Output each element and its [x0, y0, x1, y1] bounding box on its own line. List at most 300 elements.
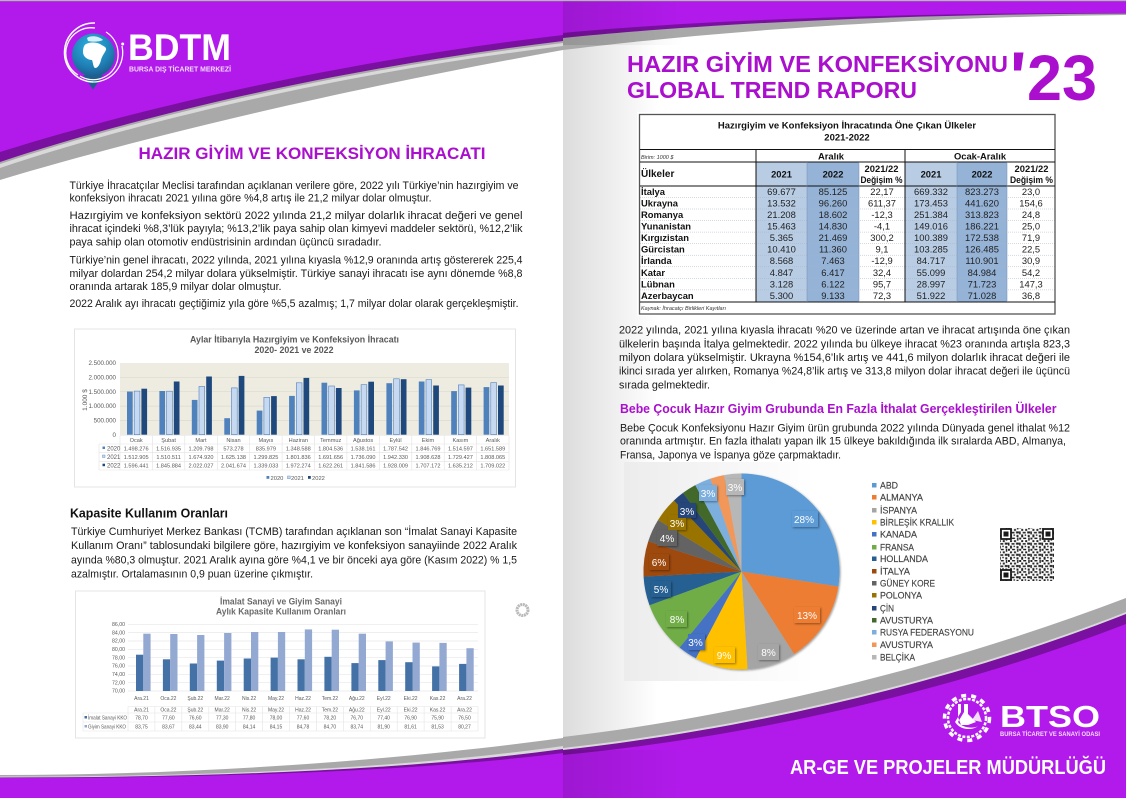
table rows: Azerbaycan [641, 290, 694, 301]
data table: 1.348.588 [286, 446, 311, 452]
table rows: 21.208 [767, 209, 796, 220]
table rows: 7.463 [821, 255, 845, 266]
data table: 1.808.065 [480, 455, 505, 461]
text block: leading countries: ülkelerin başında İtalya gelmektedir. 2022 yılında bu ülkeye ihracat %23 oranında artışla 823,3 [619, 337, 1070, 350]
pie labels: 5% [654, 585, 668, 596]
bar chart: monthly apparel exports: 0 [113, 432, 117, 439]
text block: baby apparel imports: Fransa, Japonya ve İspanya göze çarpmaktadır. [620, 449, 841, 462]
pie legend: FRANSA [880, 542, 915, 552]
pie labels: 6% [652, 558, 666, 569]
table rows: 126.485 [965, 244, 999, 255]
top edge strip [0, 0, 1126, 1]
data table: 77,60 [297, 716, 309, 722]
bar chart: monthly apparel exports: 500.000 [94, 418, 117, 425]
table headers: 2022 [823, 168, 843, 180]
table rows: 3.128 [770, 278, 793, 289]
table rows: 8.568 [770, 255, 793, 266]
data table: Tem.22 [322, 708, 338, 714]
pie labels: 3% [670, 519, 684, 530]
table rows: 69.677 [767, 186, 796, 197]
data table: 835.979 [256, 446, 276, 452]
data table: 1.908.628 [416, 455, 440, 461]
data table: 1.674.920 [189, 455, 213, 461]
plot background [120, 363, 509, 435]
y axis labels: 84,00 [112, 630, 125, 636]
table rows: 5.300 [770, 290, 793, 301]
table rows: Gürcistan [641, 244, 685, 255]
table rows: 71.028 [968, 290, 996, 301]
table rows: 85.125 [819, 186, 847, 197]
data table: Mart [195, 438, 207, 444]
pie labels: 13% [797, 611, 817, 622]
data table: 1.339.033 [253, 464, 278, 470]
data table: Ağu.22 [349, 708, 365, 714]
table headers: Aralık [818, 150, 845, 162]
table rows: 172.538 [965, 232, 999, 243]
text block: capacity usage: ayında %80,3 olmuştur. 2021 Aralık ayına göre %4,1 ve bir önceki aya göre (Kasım 2022) % 1,5 [71, 554, 517, 566]
table rows: 71,9 [1022, 232, 1040, 243]
category labels: Ağu.22 [349, 696, 365, 702]
data table: 83,67 [162, 724, 175, 730]
table headers: Ülkeler [641, 167, 674, 180]
table rows: 5.365 [770, 232, 793, 243]
table rows: 186.221 [965, 221, 999, 232]
data table: 1.804.536 [318, 446, 343, 452]
data table: 1.622.261 [318, 464, 343, 470]
pie labels: 8% [761, 648, 776, 659]
text block: export intro: paya sahip olan otomotiv endüstrisinin ardından üçüncü sıradadır. [70, 237, 382, 249]
data table: Ocak [130, 438, 143, 444]
text block: export intro [70, 179, 523, 310]
bottom banner: right page [563, 598, 1126, 798]
icon: QR code [1000, 528, 1054, 581]
table rows: 11.360 [819, 244, 847, 255]
data table: Ağustos [353, 438, 373, 444]
pie legend: ALMANYA [880, 492, 924, 502]
data table: Nisan [226, 438, 241, 444]
data table: 77,80 [243, 716, 256, 722]
data table: 1.299.825 [253, 455, 278, 461]
table rows: 84.717 [917, 255, 945, 266]
bar chart: monthly apparel exports [74, 329, 516, 487]
table rows: 28.997 [917, 278, 945, 289]
pie chart: import countries [624, 462, 839, 681]
y axis labels: 70,00 [112, 689, 125, 695]
category labels: Oca.22 [160, 696, 177, 702]
pie labels: 28% [794, 515, 814, 526]
text block: baby apparel imports [620, 422, 1070, 462]
text block: export intro: konfeksiyon ihracatı 2021 yılına göre %4,8 artış ile 21,2 milyar dolar olmuştur. [70, 193, 432, 205]
table rows: 6.417 [821, 267, 845, 278]
top banner: right page [563, 0, 1126, 50]
data table: Eyl.22 [377, 708, 391, 714]
pie labels: 8% [670, 615, 684, 626]
pie labels: 4% [660, 534, 674, 545]
pie labels: 3% [688, 638, 703, 649]
table rows: 18.602 [819, 209, 847, 220]
data table: Temmuz [320, 438, 341, 444]
data table: 2022 [107, 464, 121, 470]
table source: Kaynak: İhracatçı Birlikleri Kayıtları [641, 305, 726, 312]
data table: 1.841.586 [351, 464, 376, 470]
data table: 1.787.542 [383, 446, 408, 452]
data table: 2020 [107, 446, 121, 452]
pie labels: 9% [717, 651, 731, 662]
table rows: 823.273 [965, 186, 999, 197]
icon: small grey gear [517, 604, 528, 616]
table rows: İrlanda [641, 255, 673, 266]
table shaded columns [756, 162, 1007, 302]
table rows: -12,9 [871, 255, 893, 266]
data table: 1.510.511 [156, 455, 181, 461]
data table: 1.209.798 [189, 446, 213, 452]
table rows: 9,1 [875, 244, 889, 255]
category labels [134, 696, 472, 702]
text block: export intro: Türkiye’nin genel ihracatı, 2022 yılında, 2021 yılına kıyasla %12,9 oranında artış göstererek 225,4 [70, 255, 522, 267]
table headers: 2021 [921, 168, 941, 180]
category labels: Haz.22 [295, 696, 311, 702]
data table: 1.538.161 [351, 446, 376, 452]
y axis labels: 74,00 [112, 672, 125, 678]
data table: 75,90 [431, 716, 444, 722]
table rows: 23,0 [1022, 186, 1040, 197]
table rows: 32,4 [873, 267, 891, 278]
logo subtitle: BURSA TİCARET VE SANAYİ ODASI [1000, 730, 1100, 738]
category labels: Ara.22 [457, 696, 472, 702]
data table: 76,70 [351, 716, 363, 722]
pie legend: HOLLANDA [880, 553, 929, 564]
data table: 76,50 [458, 716, 471, 722]
logo subtitle: BURSA DIŞ TİCARET MERKEZİ [129, 66, 231, 74]
title: report name [627, 51, 1008, 103]
heading: baby apparel imports: Bebe Çocuk Hazır Giyim Grubunda En Fazla İthalat Gerçekleştirilen Ülkeler [620, 401, 1056, 416]
data table: Aralık [486, 438, 500, 444]
pie legend: RUSYA FEDERASYONU [880, 626, 974, 638]
table rows: 9.133 [821, 290, 845, 301]
table rows: 611,37 [868, 198, 896, 208]
bar chart: monthly apparel exports: 1.000.000 [88, 403, 117, 410]
table headers: 2021/22 [865, 163, 898, 174]
category labels: Nis.22 [242, 696, 256, 702]
data table: 1.709.022 [480, 464, 505, 470]
category labels: Kas.22 [430, 696, 446, 702]
table headers [641, 150, 1054, 185]
data table: 78,20 [324, 716, 336, 722]
y axis labels [112, 622, 125, 695]
table rows: 55.099 [917, 267, 945, 278]
data table: İmalat Sanayi KKO [88, 714, 127, 722]
data table: Ekim [422, 438, 435, 444]
pie legend: BİRLEŞİK KRALLIK [880, 516, 955, 528]
y axis labels: 80,00 [112, 647, 125, 653]
chart title [216, 596, 346, 616]
table rows: 4.847 [770, 267, 793, 278]
table rows: 13.532 [767, 198, 796, 208]
category labels: Mar.22 [215, 696, 230, 702]
data table: 80,27 [458, 724, 471, 730]
data table: 78,00 [270, 716, 282, 722]
data table: 1.498.276 [124, 446, 149, 452]
table rows: 100.389 [914, 232, 948, 243]
table rows: 147,3 [1019, 278, 1043, 289]
data table: 1.635.212 [448, 464, 473, 470]
data table: 1.846.769 [416, 446, 440, 452]
data table: Haziran [289, 438, 308, 444]
table rows: 21.469 [819, 232, 847, 243]
table rows: Lübnan [641, 278, 675, 289]
chart title: Aylık Kapasite Kullanım Oranları [216, 606, 346, 616]
table rows: 25,0 [1022, 221, 1040, 232]
text block: baby apparel imports: Bebe Çocuk Konfeksiyonu Hazır Giyim ürün grubunda 2022 yılında Dünyada genel ithalat %12 [620, 422, 1070, 434]
table rows: 95,7 [873, 278, 891, 289]
table headers: 2021/22 [1015, 163, 1048, 174]
pie legend: İTALYA [880, 566, 911, 576]
text block: capacity usage: Kullanım Oranı” tablosundaki bilgilere göre, hazırgiyim ve konfeksiyon sanayiinde 2022 Aralık [71, 540, 517, 552]
icon: BTSO gear emblem [944, 696, 990, 740]
table rows: 22,5 [1022, 244, 1040, 255]
table rows: 110.901 [965, 255, 999, 266]
pie labels: 3% [701, 489, 715, 500]
table rows: 54,2 [1022, 267, 1040, 278]
data table: Eki.22 [404, 708, 418, 714]
data table: Ara.22 [457, 708, 472, 714]
y axis labels: 78,00 [112, 655, 125, 661]
data table: 1.516.935 [156, 446, 181, 452]
data table: 1.801.836 [286, 455, 311, 461]
y axis title: 1.000 $ [82, 389, 89, 411]
table rows: Kırgızistan [641, 232, 689, 243]
text block: export intro: oranında artarak 185,9 milyar dolar olmuştur. [70, 281, 282, 293]
data table: 81,61 [404, 724, 417, 730]
data table: 1.625.138 [221, 455, 246, 461]
pie legend: AVUSTURYA [880, 639, 934, 650]
table headers: Ocak-Aralık [954, 150, 1007, 162]
logo wordmark: BDTM [128, 27, 231, 68]
text block: leading countries: milyon dolara yükselmiştir. Ukrayna %154,6’lık artış ve 441,6 milyon dolarlık ihracat değeri ile [619, 352, 1070, 364]
table rows: -12,3 [871, 209, 893, 220]
data table: 1.596.441 [124, 464, 149, 470]
data table: 1.512.905 [124, 455, 149, 461]
data table: 84,14 [243, 724, 256, 730]
data table: 1.736.090 [351, 455, 376, 461]
y axis labels: 72,00 [112, 680, 125, 686]
pie legend: AVUSTURYA [880, 614, 934, 626]
table rows: 22,17 [870, 186, 894, 197]
text block: export intro: Hazırgiyim ve konfeksiyon sektörü 2022 yılında 21,2 milyar dolarlık ihracat değeri ve genel [70, 210, 522, 222]
data table: 573.278 [223, 446, 244, 452]
title: report name: GLOBAL TREND RAPORU [627, 77, 917, 103]
table rows: 71.723 [968, 278, 996, 289]
data table: Eylül [390, 438, 402, 444]
data table: 84,78 [297, 724, 309, 730]
table rows [641, 186, 1043, 301]
data table: 84,15 [270, 724, 282, 730]
y axis labels: 76,00 [112, 664, 125, 670]
data table: 2.022.027 [189, 464, 213, 470]
table rows: 14.830 [819, 221, 847, 232]
data table: 2021 [107, 455, 121, 461]
table rows: Yunanistan [641, 221, 691, 232]
legend [266, 476, 325, 482]
pie legend [872, 480, 974, 662]
table rows: 300,2 [870, 232, 894, 243]
legend: 2022 [312, 476, 325, 482]
category labels: Şub.22 [187, 696, 203, 702]
legend: 2021 [291, 476, 304, 482]
text block: leading countries: sırada gelmektedir. [619, 379, 710, 391]
chart title: Aylar İtibarıyla Hazırgiyim ve Konfeksiyon İhracatı [190, 334, 399, 344]
table rows: 72,3 [873, 290, 891, 301]
table rows: Katar [641, 267, 665, 278]
data table: 2.041.674 [221, 464, 246, 470]
text block: baby apparel imports: oranında artmıştır. En fazla ithalatı yapan ilk 15 ülkeye bakıldığında ilk sıralarda ABD, Almanya, [620, 436, 1066, 448]
data table: 77,30 [216, 716, 229, 722]
table rows: Romanya [641, 209, 684, 220]
table title: 2021-2022 [824, 132, 870, 144]
table title [718, 120, 976, 144]
text block: leading countries: 2022 yılında, 2021 yılına kıyasla ihracatı %20 ve üzerinde artan ve ihracat artışında öne çıkan [619, 325, 1070, 337]
data table: 77,40 [377, 716, 390, 722]
text block: export intro: milyar dolardan 254,2 milyar dolara yükselmiştir. Türkiye sanayi ihracatı ise aynı dönemde %8,8 [70, 268, 522, 280]
text block: leading countries: ikinci sırada yer alırken, Romanya %24,8’lik artış ve 313,8 milyon dolar ihracat değeri ile üçüncü [619, 366, 1070, 378]
pie legend: KANADA [880, 528, 918, 540]
chart title: 2020- 2021 ve 2022 [254, 345, 334, 355]
data table: May.22 [268, 708, 284, 714]
data table: 83,90 [216, 724, 229, 730]
table rows: 96.260 [819, 198, 847, 208]
chart title [190, 334, 399, 355]
table rows: 103.285 [914, 244, 948, 255]
data table: Şub.22 [187, 708, 203, 714]
data table: Kasım [452, 438, 469, 444]
year mark '23: 23 [1027, 42, 1097, 114]
table rows: 51.922 [917, 290, 945, 301]
table headers: 2021 [771, 168, 792, 180]
data table: 1.972.274 [286, 464, 311, 470]
data table: 1.691.656 [318, 455, 343, 461]
table rows: 84.984 [968, 267, 996, 278]
data table: 1.942.330 [383, 455, 408, 461]
heading: capacity usage: Kapasite Kullanım Oranları [70, 506, 228, 520]
pie legend: BELÇİKA [880, 652, 916, 662]
table rows: 669.332 [914, 186, 948, 197]
table: leading countries [637, 112, 1057, 316]
bar chart: monthly apparel exports: 2.500.000 [88, 360, 117, 367]
table rows: 441.620 [965, 198, 999, 208]
data table: 77,60 [162, 716, 175, 722]
table rows: Ukrayna [641, 198, 679, 208]
table rows: 36,8 [1022, 290, 1040, 301]
data table: Oca.22 [160, 708, 177, 714]
table rows: 173.453 [914, 198, 948, 208]
title: report name: HAZIR GİYİM VE KONFEKSİYONU [627, 51, 1008, 77]
pie legend: GÜNEY KORE [880, 578, 935, 588]
text block: export intro: 2022 Aralık ayı ihracatı geçtiğimiz yıla göre %5,5 azalmış; 1,7 milyar dolar olarak gerçekleşmiştir. [70, 298, 518, 310]
table rows: 149.016 [914, 221, 948, 232]
data table: 1.845.884 [156, 464, 181, 470]
pie legend: POLONYA [880, 590, 923, 600]
data table: Giyim Sanayi KKO [88, 724, 126, 730]
table rows: 6.122 [821, 278, 845, 289]
data table: Nis.22 [242, 708, 256, 714]
pie labels: 3% [680, 507, 694, 518]
pie slices [643, 474, 839, 669]
data table: 78,70 [135, 716, 148, 722]
data table: Şubat [161, 438, 176, 444]
y axis labels: 82,00 [112, 639, 125, 645]
table headers: 2022 [972, 168, 992, 180]
gridlines [128, 624, 478, 691]
pie legend: ABD [880, 480, 898, 490]
data table: 1.729.427 [448, 455, 473, 461]
category labels: Tem.22 [322, 696, 338, 702]
category labels: May.22 [268, 696, 284, 702]
table title: Hazırgiyim ve Konfeksiyon İhracatında Öne Çıkan Ülkeler [718, 120, 976, 132]
bars [127, 376, 504, 435]
data table: Haz.22 [295, 708, 311, 714]
table rows: 10.410 [767, 244, 796, 255]
data table: 1.928.009 [383, 464, 408, 470]
table rows: 15.463 [767, 221, 796, 232]
table headers: Değişim % [1010, 174, 1054, 185]
table headers: Değişim % [860, 174, 903, 185]
text block: leading countries [619, 325, 1070, 391]
gridlines and y axis [120, 377, 509, 420]
icon: globe pin [64, 23, 124, 90]
category labels: Eki.22 [404, 696, 418, 702]
table rows: 313.823 [965, 209, 999, 220]
data table: Mar.22 [215, 708, 230, 714]
heading: left page: HAZIR GİYİM VE KONFEKSİYON İHRACATI [138, 145, 486, 163]
table rows: -4,1 [874, 221, 890, 232]
data table: 76,90 [404, 716, 417, 722]
text block: export intro: ihracat içindeki %8,3’lük payıyla; %13,2’lik paya sahip olan kimyevi maddeler sektörü, %12,2’lik [70, 223, 523, 235]
data table: 1.707.172 [416, 464, 440, 470]
bottom banner: left page [0, 738, 563, 798]
table rows: 154,6 [1019, 198, 1043, 208]
text block: capacity usage: Türkiye Cumhuriyet Merkez Bankası (TCMB) tarafından açıklanan son “İmalat Sanayi Kapasite [71, 525, 517, 538]
text block: capacity usage: azalmıştır. Ortalamasının 0,9 puan üzerine çıkmıştır. [71, 568, 313, 580]
unit note: Birim: 1000 $ [641, 155, 674, 161]
pie legend: İSPANYA [880, 504, 918, 516]
legend: 2020 [270, 476, 283, 482]
logo: BDTM [64, 23, 231, 90]
table rows: 30,9 [1022, 255, 1040, 266]
data table: 81,90 [377, 724, 390, 730]
data table: 83,44 [189, 724, 202, 730]
chart title: İmalat Sanayi ve Giyim Sanayi [220, 596, 342, 606]
bar chart: monthly apparel exports: 1.500.000 [88, 389, 117, 396]
table rows: 251.384 [914, 209, 948, 220]
logo wordmark: BTSO [1000, 699, 1100, 734]
data table [83, 706, 478, 731]
data table: 83,75 [135, 724, 148, 730]
category labels: Eyl.22 [377, 696, 391, 702]
bar chart: capacity utilisation [76, 591, 485, 738]
data table: Kas.22 [430, 708, 446, 714]
data table: 81,53 [431, 724, 444, 730]
data table: Ara.21 [134, 708, 149, 714]
data table [99, 436, 509, 470]
y axis labels: 86,00 [112, 622, 125, 628]
pie labels [649, 479, 820, 663]
bar chart: monthly apparel exports: 2.000.000 [88, 374, 117, 381]
logo: BTSO [944, 696, 1100, 740]
pie legend: ÇİN [880, 602, 894, 614]
text block: capacity usage [71, 525, 517, 580]
table rows: İtalya [641, 186, 666, 197]
table rows: 24,8 [1022, 209, 1040, 220]
